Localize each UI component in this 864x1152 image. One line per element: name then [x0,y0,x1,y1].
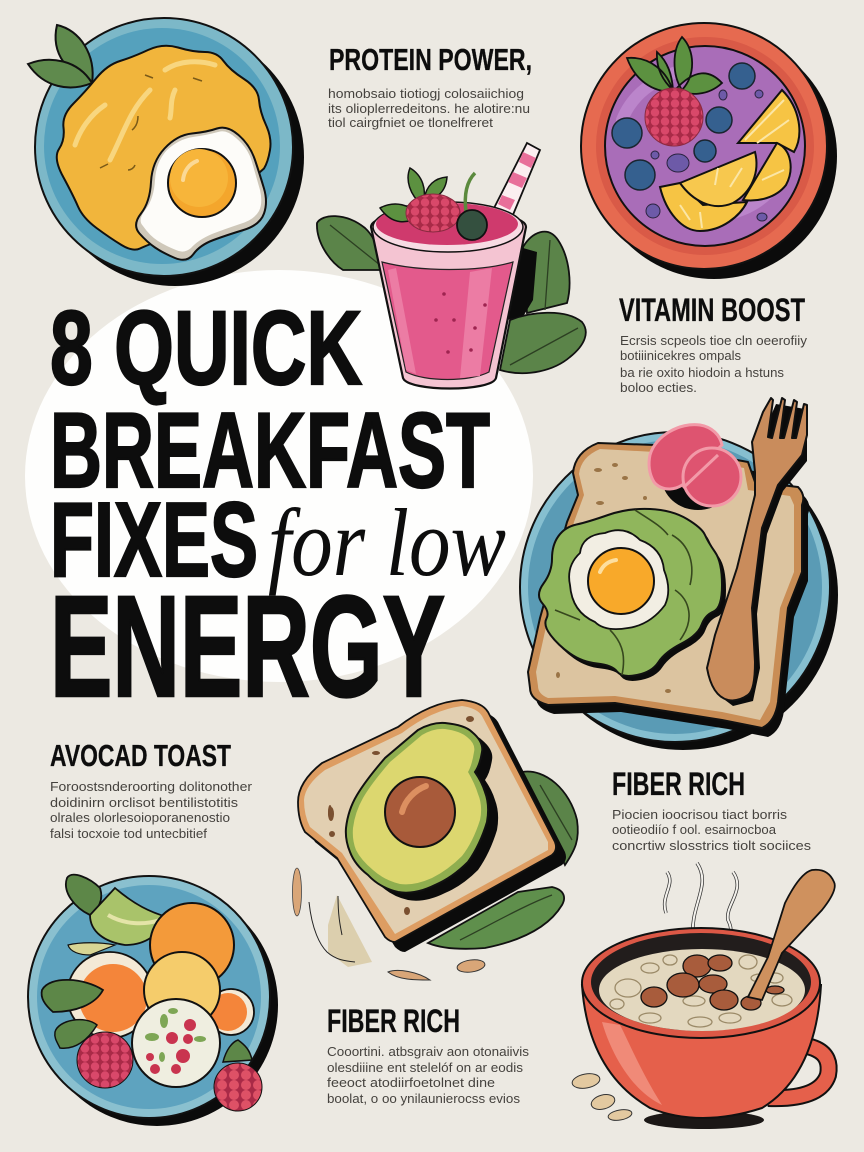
spoon [748,870,835,1000]
heading: vitamin boost: VITAMIN BOOST [619,292,805,328]
icon: avocado toast [292,700,578,980]
icon: acai bowl [581,23,837,279]
icon: oatmeal bowl [571,863,835,1129]
spinach leaves [317,216,586,373]
heading: fiber rich (right): FIBER RICH [612,766,745,802]
leaves [28,25,93,87]
icon: avocado egg toast plate [520,398,838,750]
text block: fiber rich (bottom): boolat, o oo ynilaunierocss evios [327,1091,521,1106]
text block: fiber rich (bottom): feeoct atodiirfoetolnet dine [327,1075,495,1090]
text block: avocado toast: Foroostsnderoorting dolitonother [50,779,253,794]
straw [492,143,540,222]
raspberry [627,37,722,146]
text block: vitamin boost: boloo ecties. [620,380,697,395]
text block: fiber rich (bottom): olesdiiine ent stelelóf on ar eodis [327,1060,524,1075]
text block: vitamin boost: botiiinicekres ompals [620,348,741,363]
heading: fiber rich (bottom): FIBER RICH [327,1003,460,1039]
text block: fiber rich (right): concrtiw slosstrics tiolt sociices [612,838,812,853]
text block: vitamin boost: ba rie oxito hiodoin a hstuns [620,365,785,380]
spinach leaves [428,772,578,949]
raspberry [380,168,460,232]
text block: fiber rich (right): ootieodiío f ool. esairnocboa [612,822,777,837]
text block: protein power: its olioplerredeitons. he alotire:nu [328,101,530,116]
oats [571,1072,633,1122]
heading: avocado toast: AVOCAD TOAST [50,738,231,773]
text block: vitamin boost: Ecrsis scpeols tioe cln oeerofiiy [620,333,808,348]
handle [768,1045,829,1098]
title: for low [268,489,506,596]
heading: protein power: PROTEIN POWER, [329,42,532,77]
text block: protein power: homobsaio tiotiogj colosaiichiog [328,86,524,101]
text block: avocado toast: olrales olorlesoioporanenostio [50,810,230,825]
crumbs [292,868,486,980]
steam [665,863,737,937]
icon: fruit plate [28,875,278,1126]
title: 8 QUICK [50,290,362,407]
orange slices [660,90,799,231]
nuts [641,955,784,1010]
fork [707,398,807,706]
title [50,290,506,727]
text block: fiber rich (right) [612,807,812,853]
text block: protein power [328,86,530,130]
title: BREAKFAST [50,390,490,510]
text block: vitamin boost [620,333,808,395]
icon: smoothie glass [317,143,586,388]
berry [457,173,487,240]
fruit slices [649,425,741,510]
text block: avocado toast: falsi tocxoie tod untecbitief [50,826,207,841]
text block: protein power: tiol cairgfniet oe tlonelfreret [328,115,493,130]
icon: egg plate [28,18,304,286]
text block: fiber rich (bottom) [327,1044,530,1106]
text block: avocado toast [50,779,253,841]
title: FIXES [50,481,258,599]
text block: avocado toast: doidinirn orclisot bentilistotitis [50,795,239,810]
text block: fiber rich (bottom): Cooortini. atbsgraiv aon otonaiivis [327,1044,530,1059]
title: ENERGY [50,566,445,727]
text block: fiber rich (right): Piocien ioocrisou tiact borris [612,807,788,822]
